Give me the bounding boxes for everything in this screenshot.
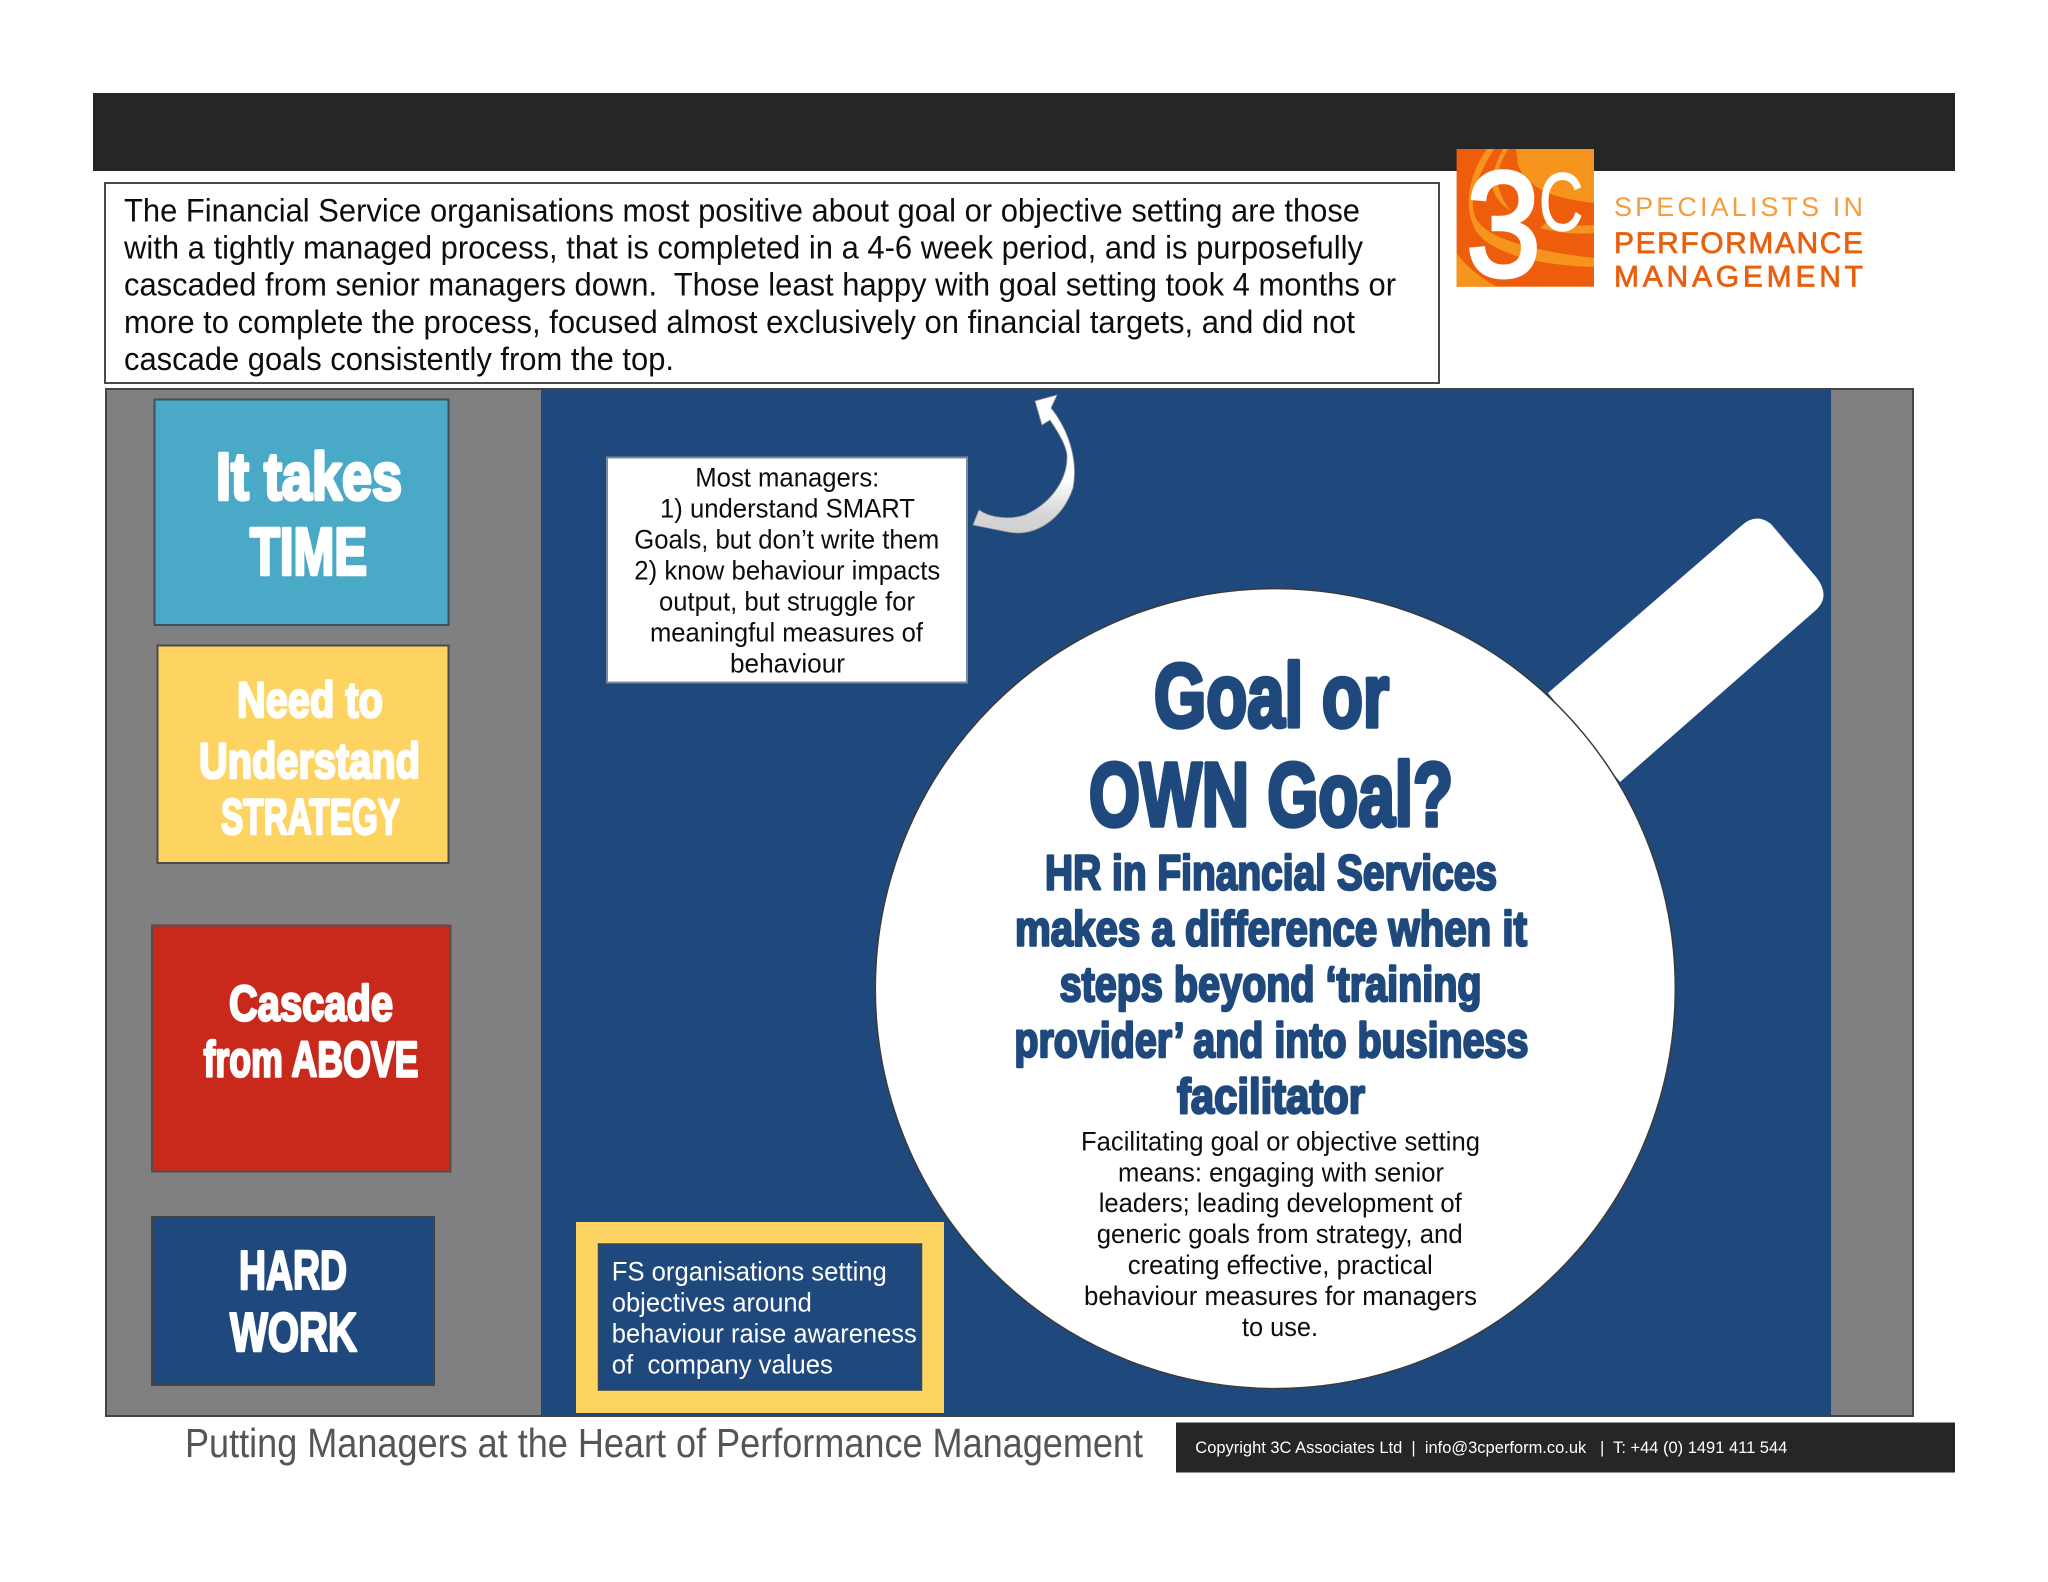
body text: creating effective, practical: [1128, 1250, 1433, 1280]
callout: most managers: meaningful measures of: [650, 618, 923, 648]
magnifying glass circle: [875, 589, 1675, 1389]
body text: Facilitating goal or objective setting: [1081, 1127, 1480, 1157]
intro text box: cascaded from senior managers down. Those least happy with goal setting took 4 months or: [124, 267, 1396, 303]
headline: Goal or: [1154, 646, 1389, 746]
box: cascade from above: Cascade: [229, 976, 393, 1032]
callout: most managers: output, but struggle for: [659, 587, 915, 617]
subheading: makes a difference when it: [1015, 902, 1527, 956]
box: need to understand strategy: [158, 646, 448, 863]
logo: 3C: [1457, 140, 1594, 308]
logo tagline: PERFORMANCE: [1614, 227, 1863, 260]
callout: FS organisations: FS organisations setting: [612, 1256, 887, 1286]
magnifying glass handle: [1548, 518, 1824, 782]
headline: OWN Goal?: [1089, 746, 1453, 846]
header bar: [93, 93, 1955, 171]
box: hard work: WORK: [230, 1301, 357, 1363]
subheading: facilitator: [1177, 1070, 1365, 1124]
callout: most managers: [607, 458, 967, 682]
body text: leaders; leading development of: [1099, 1188, 1462, 1218]
box: it takes time: [154, 400, 448, 625]
intro text box: cascade goals consistently from the top.: [124, 341, 674, 377]
box: hard work: HARD: [239, 1239, 347, 1301]
blue centre panel: [541, 390, 1831, 1416]
box: need to understand strategy: Need to: [237, 672, 383, 728]
callout: most managers: 2) know behaviour impacts: [634, 555, 940, 585]
callout: most managers: Most managers:: [695, 463, 879, 493]
callout: FS organisations: [576, 1222, 944, 1413]
logo tagline: SPECIALISTS IN: [1614, 192, 1863, 222]
logo tagline: MANAGEMENT: [1614, 260, 1863, 294]
box: cascade from above: from ABOVE: [204, 1032, 418, 1088]
arrow: curved up to intro text: [973, 395, 1074, 533]
callout: most managers: behaviour: [730, 648, 845, 678]
callout: FS organisations: behaviour raise awareness: [612, 1318, 917, 1348]
intro text box: more to complete the process, focused almost exclusively on financial targets, and did not: [124, 304, 1355, 340]
body text: to use.: [1242, 1312, 1318, 1342]
box: it takes time: It takes: [216, 440, 402, 514]
footer bar: Copyright 3C Associates Ltd | info@3cperform.co.uk | T: +44 (0) 1491 411 544: [1195, 1438, 1787, 1457]
callout: FS organisations: objectives around: [612, 1288, 812, 1318]
callout: most managers: 1) understand SMART: [660, 494, 915, 524]
box: it takes time: TIME: [250, 514, 367, 590]
box: need to understand strategy: STRATEGY: [221, 789, 400, 845]
subheading: provider’ and into business: [1014, 1014, 1528, 1068]
callout: most managers: Goals, but don’t write them: [634, 525, 939, 555]
intro text box: [105, 183, 1439, 383]
logo: 3C: 3: [1466, 140, 1541, 308]
body text: means: engaging with senior: [1118, 1157, 1444, 1187]
logo tagline: [1614, 192, 1863, 294]
body text: [1081, 1127, 1480, 1342]
subheading: HR in Financial Services: [1045, 847, 1497, 901]
box: hard work: [152, 1217, 434, 1385]
tagline: Putting Managers at the Heart of Performance Management: [185, 1420, 1144, 1466]
subheading: [1014, 847, 1528, 1124]
callout: FS organisations: of company values: [612, 1350, 833, 1380]
logo: 3C: C: [1539, 157, 1583, 248]
body text: generic goals from strategy, and: [1097, 1219, 1463, 1249]
intro text box: with a tightly managed process, that is completed in a 4-6 week period, and is purposefully: [123, 229, 1363, 265]
subheading: steps beyond ‘training: [1060, 958, 1482, 1012]
intro text box: The Financial Service organisations most positive about goal or objective setting are those: [124, 192, 1360, 228]
main panel: [106, 389, 1913, 1416]
box: cascade from above: [152, 926, 450, 1172]
headline: [1089, 646, 1453, 846]
body text: behaviour measures for managers: [1084, 1281, 1477, 1311]
box: need to understand strategy: Understand: [199, 733, 420, 789]
footer bar: [1176, 1422, 1955, 1472]
